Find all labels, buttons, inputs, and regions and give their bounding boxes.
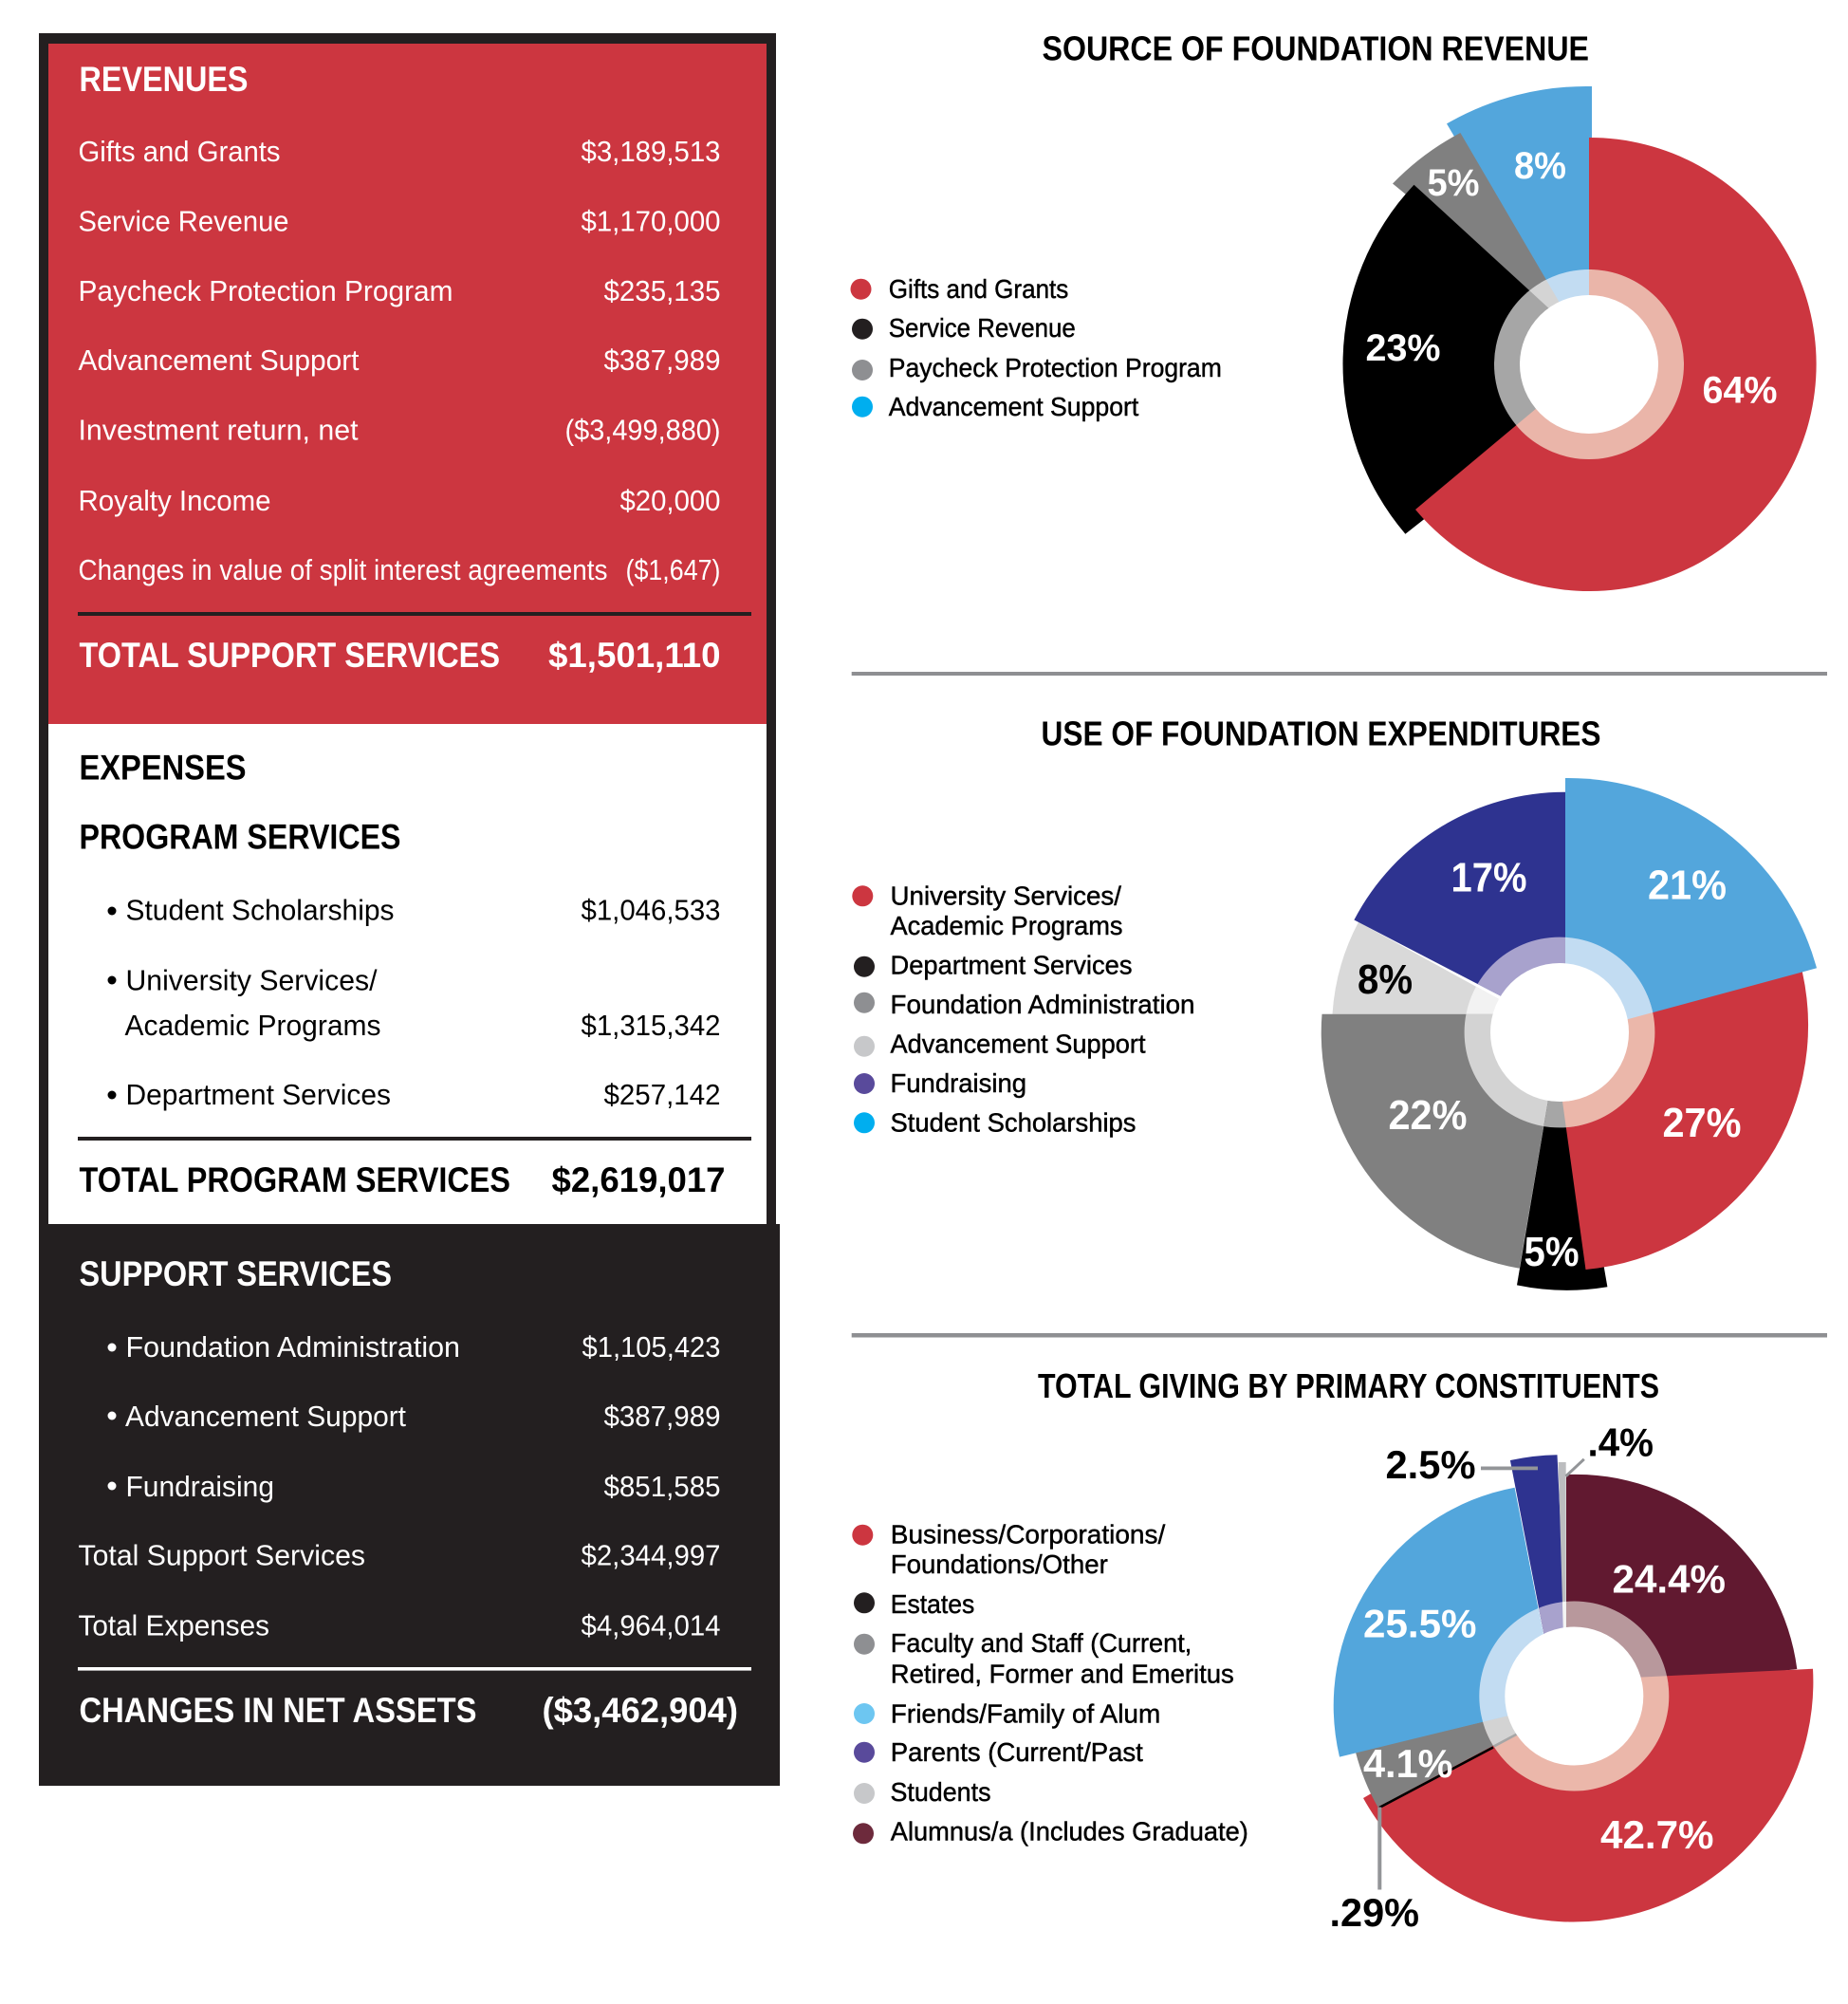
panel: expenses and program services (48, 724, 767, 1225)
row: total program services: TOTAL PROGRAM SERVICES (80, 1160, 510, 1199)
title: total giving by primary constituents: TOTAL GIVING BY PRIMARY CONSTITUENTS (1038, 1366, 1659, 1405)
row: gifts and grants (78, 135, 721, 168)
label: 25.5%: 25.5% (1363, 1602, 1476, 1645)
label: 5%: 5% (1427, 162, 1480, 204)
row: royalty income: $20,000 (620, 484, 721, 517)
row: advancement support: $387,989 (603, 343, 721, 377)
row: changes in net assets (80, 1691, 738, 1730)
panel: revenues (48, 44, 767, 724)
row: department services: $257,142 (603, 1078, 721, 1111)
legend item: students: Students (890, 1777, 990, 1807)
row: service revenue (78, 205, 721, 237)
row: university services: $1,315,342 (581, 1009, 721, 1042)
row: changes in net assets: CHANGES IN NET ASSETS (80, 1691, 476, 1730)
legend item: fundraising: Fundraising (890, 1068, 1026, 1098)
legend item: faculty and staff (854, 1628, 1234, 1688)
row: advancement support (108, 1400, 721, 1433)
label: 5%: 5% (1524, 1229, 1579, 1275)
row: total support services: $1,501,110 (548, 636, 721, 675)
row: student scholarships (108, 894, 721, 926)
legend item: university services: Academic Programs (890, 911, 1123, 940)
legend item: friends family of alum: Friends/Family of Alum (891, 1698, 1160, 1728)
legend item: advancement support: Advancement Support (890, 1030, 1146, 1059)
legend item: parents: Parents (Current/Past (891, 1737, 1143, 1767)
row: student scholarships: Student Scholarships (125, 894, 395, 926)
legend item: business corporations foundations other (852, 1520, 1166, 1579)
chart: constituents pie (1330, 1420, 1813, 1935)
legend: constituents (852, 1520, 1248, 1846)
row: advancement support: $387,989 (603, 1400, 721, 1433)
legend: revenue sources (850, 274, 1222, 421)
label: 42.7%: 42.7% (1600, 1812, 1713, 1857)
row: paycheck protection program: $235,135 (603, 274, 721, 307)
legend item: estates (854, 1589, 974, 1619)
row: total support services: $2,344,997 (581, 1539, 721, 1571)
legend item: faculty and staff: Faculty and Staff (Current, (891, 1628, 1192, 1658)
row: student scholarships: $1,046,533 (581, 894, 721, 926)
row: service revenue: Service Revenue (78, 205, 288, 237)
legend item: service revenue: Service Revenue (889, 313, 1076, 343)
row: advancement support: Advancement Support (125, 1400, 406, 1433)
row: fundraising (108, 1470, 721, 1503)
row: total support services: TOTAL SUPPORT SERVICES (80, 636, 500, 675)
heading: revenues: REVENUES (80, 60, 249, 99)
row: department services: Department Services (125, 1078, 391, 1111)
chart: expenditures pie (1321, 778, 1817, 1290)
row: royalty income (78, 484, 721, 517)
row: foundation administration: Foundation Administration (125, 1330, 460, 1364)
row: total program services: $2,619,017 (552, 1160, 725, 1199)
legend item: paycheck protection program: Paycheck Protection Program (889, 353, 1222, 382)
label: 23%: 23% (1366, 327, 1440, 369)
title: source of foundation revenue: SOURCE OF FOUNDATION REVENUE (1042, 28, 1589, 68)
label: 21%: 21% (1648, 862, 1727, 909)
label: 8%: 8% (1358, 956, 1413, 1003)
legend: expenditures (852, 881, 1195, 1137)
row: advancement support (78, 343, 721, 377)
row: total support services: Total Support Services (78, 1539, 365, 1571)
label: 27%: 27% (1662, 1100, 1742, 1146)
row: gifts and grants: $3,189,513 (581, 135, 721, 168)
callout: 2.5%: 2.5% (1385, 1442, 1476, 1487)
legend item: faculty and staff: Retired, Former and Emeritus (891, 1659, 1234, 1688)
row: advancement support: Advancement Support (78, 343, 360, 377)
legend item: foundation administration: Foundation Administration (890, 990, 1195, 1019)
panel: support services (39, 1224, 780, 1786)
row: total expenses (78, 1609, 721, 1642)
legend item: business corporations foundations other: Foundations/Other (891, 1549, 1108, 1579)
legend item: university services: University Services/ (890, 881, 1121, 910)
legend item: student scholarships: Student Scholarships (890, 1108, 1137, 1137)
row: total expenses: Total Expenses (78, 1609, 269, 1642)
row: paycheck protection program: Paycheck Protection Program (78, 274, 453, 307)
callout: .29% (1330, 1807, 1419, 1935)
heading: support services: SUPPORT SERVICES (80, 1254, 392, 1293)
row: total expenses: $4,964,014 (581, 1609, 721, 1642)
row: fundraising: $851,585 (603, 1470, 721, 1503)
title: use of foundation expenditures: USE OF FOUNDATION EXPENDITURES (1042, 714, 1601, 753)
panel: financial statement (39, 33, 780, 1786)
legend item: advancement support: Advancement Support (889, 392, 1139, 421)
row: foundation administration: $1,105,423 (582, 1330, 721, 1364)
row: investment return (78, 414, 721, 446)
row: royalty income: Royalty Income (78, 484, 271, 517)
row: university services: Academic Programs (125, 1009, 381, 1042)
label: 8%: 8% (1514, 145, 1566, 187)
legend item: gifts and grants: Gifts and Grants (889, 274, 1068, 304)
legend item: department services: Department Services (890, 951, 1133, 979)
row: investment return: ($3,499,880) (565, 414, 721, 446)
label: 17%: 17% (1451, 854, 1527, 901)
row: foundation administration (108, 1330, 721, 1364)
label: 22%: 22% (1389, 1092, 1467, 1139)
label: 24.4%: 24.4% (1613, 1556, 1726, 1602)
heading: program services: PROGRAM SERVICES (80, 818, 400, 856)
row: total support services (78, 1539, 721, 1571)
callout: .29%: .29% (1330, 1890, 1419, 1935)
row: split interest agreements: Changes in value of split interest agreements (78, 553, 607, 586)
heading: expenses: EXPENSES (80, 748, 247, 788)
legend item: estates: Estates (891, 1589, 974, 1619)
row: fundraising: Fundraising (125, 1470, 274, 1503)
label: 64%: 64% (1702, 370, 1778, 412)
legend item: university services (852, 881, 1123, 940)
row: gifts and grants: Gifts and Grants (78, 135, 281, 168)
label: 4.1%: 4.1% (1363, 1741, 1453, 1786)
chart: revenue pie (1343, 86, 1817, 591)
row: university services (108, 964, 721, 1042)
row: paycheck protection program (78, 274, 721, 307)
legend item: alumnus: Alumnus/a (Includes Graduate) (891, 1816, 1248, 1846)
row: investment return: Investment return, net (78, 414, 359, 446)
row: service revenue: $1,170,000 (581, 205, 721, 237)
callout: .4% (1566, 1420, 1654, 1476)
legend item: business corporations foundations other: Business/Corporations/ (891, 1520, 1166, 1549)
row: split interest agreements: ($1,647) (626, 553, 721, 586)
row: department services (108, 1078, 721, 1111)
row: university services: University Services/ (125, 964, 378, 996)
callout: .4%: .4% (1588, 1420, 1654, 1465)
callout: 2.5% (1385, 1442, 1538, 1487)
row: changes in net assets: ($3,462,904) (543, 1691, 738, 1730)
